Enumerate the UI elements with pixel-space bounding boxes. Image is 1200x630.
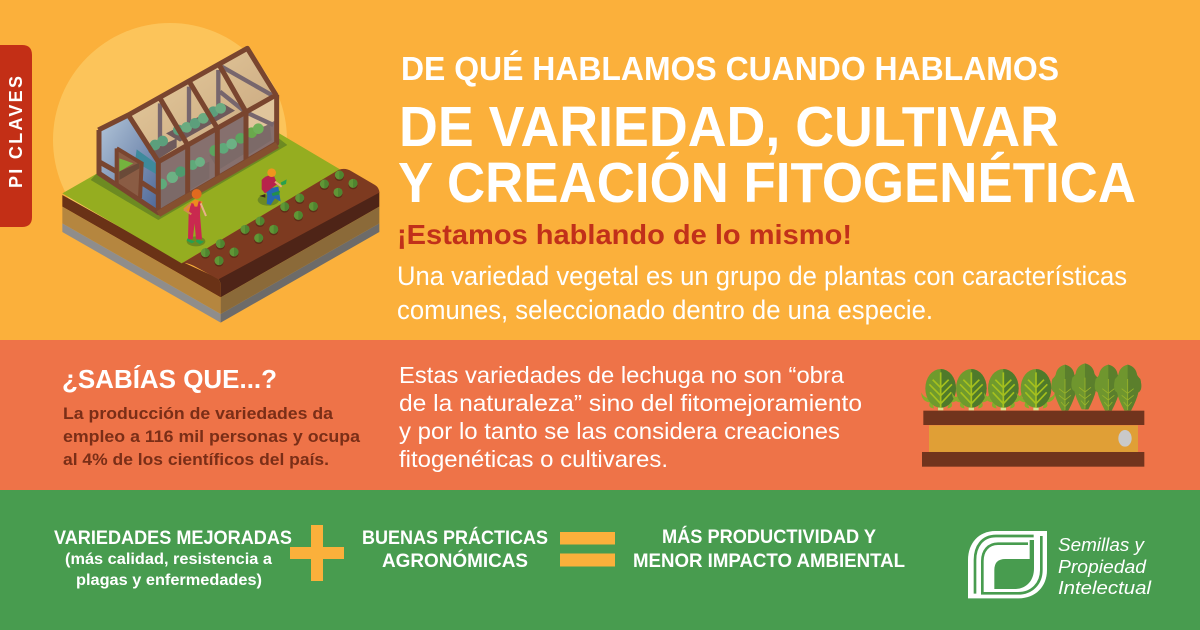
back frame and planters — [135, 67, 273, 208]
subtitle: ¡Estamos hablando de lo mismo! — [397, 219, 852, 250]
equation term: improved varieties: VARIEDADES MEJORADAS — [54, 528, 292, 549]
top background panel — [0, 0, 1200, 340]
logo mark — [968, 531, 1047, 598]
door — [117, 148, 142, 198]
equation term: improved varieties: plagas y enfermedades) — [76, 572, 262, 589]
did you know text: al 4% de los científicos del país. — [63, 450, 329, 469]
lettuce text: y por lo tanto se las considera creaciones — [399, 418, 840, 444]
equation result: MENOR IMPACTO AMBIENTAL — [633, 551, 905, 572]
lettuce text: de la naturaleza” sino del fitomejoramiento — [399, 390, 862, 416]
logo text: Intelectual — [1058, 577, 1152, 598]
woman gardener — [183, 189, 206, 246]
grass — [62, 101, 340, 263]
illustration: lettuce planter — [921, 363, 1144, 467]
lettuce text: Estas variedades de lechuga no son “obra — [399, 362, 844, 388]
tab: PI Claves: PI CLAVES — [6, 76, 26, 188]
equation result — [633, 526, 905, 572]
ploughed field — [182, 169, 379, 279]
equation term: improved varieties — [54, 528, 292, 589]
panel: equation band — [0, 490, 1200, 630]
equation term: improved varieties: (más calidad, resistencia a — [65, 551, 272, 568]
equation term: good agronomic practices — [362, 527, 548, 572]
tab: PI Claves — [0, 45, 32, 227]
title — [398, 50, 1136, 215]
icon: equals sign — [560, 532, 615, 566]
crops — [201, 170, 357, 267]
illustration: isometric greenhouse farm — [53, 23, 379, 323]
title: Y CREACIÓN FITOGENÉTICA — [398, 151, 1136, 215]
soil block — [62, 192, 379, 323]
lettuce text — [399, 362, 862, 472]
did you know text: La producción de variedades da — [63, 404, 334, 423]
logo text: Semillas y — [1058, 534, 1146, 555]
icon: plus sign — [290, 525, 344, 581]
did you know heading: ¿SABÍAS QUE...? — [62, 364, 277, 394]
definition text — [397, 261, 1127, 325]
sun circle — [53, 23, 287, 257]
did you know text: empleo a 116 mil personas y ocupa — [63, 427, 361, 446]
greenhouse — [91, 48, 287, 220]
did you know text — [63, 404, 361, 469]
lettuce text: fitogenéticas o cultivares. — [399, 446, 668, 472]
equation term: good agronomic practices: BUENAS PRÁCTICAS — [362, 527, 548, 549]
title: DE VARIEDAD, CULTIVAR — [399, 95, 1059, 159]
timber frame — [98, 48, 277, 214]
definition text: comunes, seleccionado dentro de una especie. — [397, 295, 933, 325]
equation term: good agronomic practices: AGRONÓMICAS — [382, 550, 528, 572]
equation result: MÁS PRODUCTIVIDAD Y — [662, 526, 876, 548]
title: DE QUÉ HABLAMOS CUANDO HABLAMOS — [401, 50, 1059, 87]
logo text — [1058, 534, 1152, 598]
panel: did you know band — [0, 340, 1200, 490]
kneeling gardener — [258, 168, 287, 206]
logo text: Propiedad — [1058, 556, 1147, 577]
definition text: Una variedad vegetal es un grupo de plantas con características — [397, 261, 1127, 291]
